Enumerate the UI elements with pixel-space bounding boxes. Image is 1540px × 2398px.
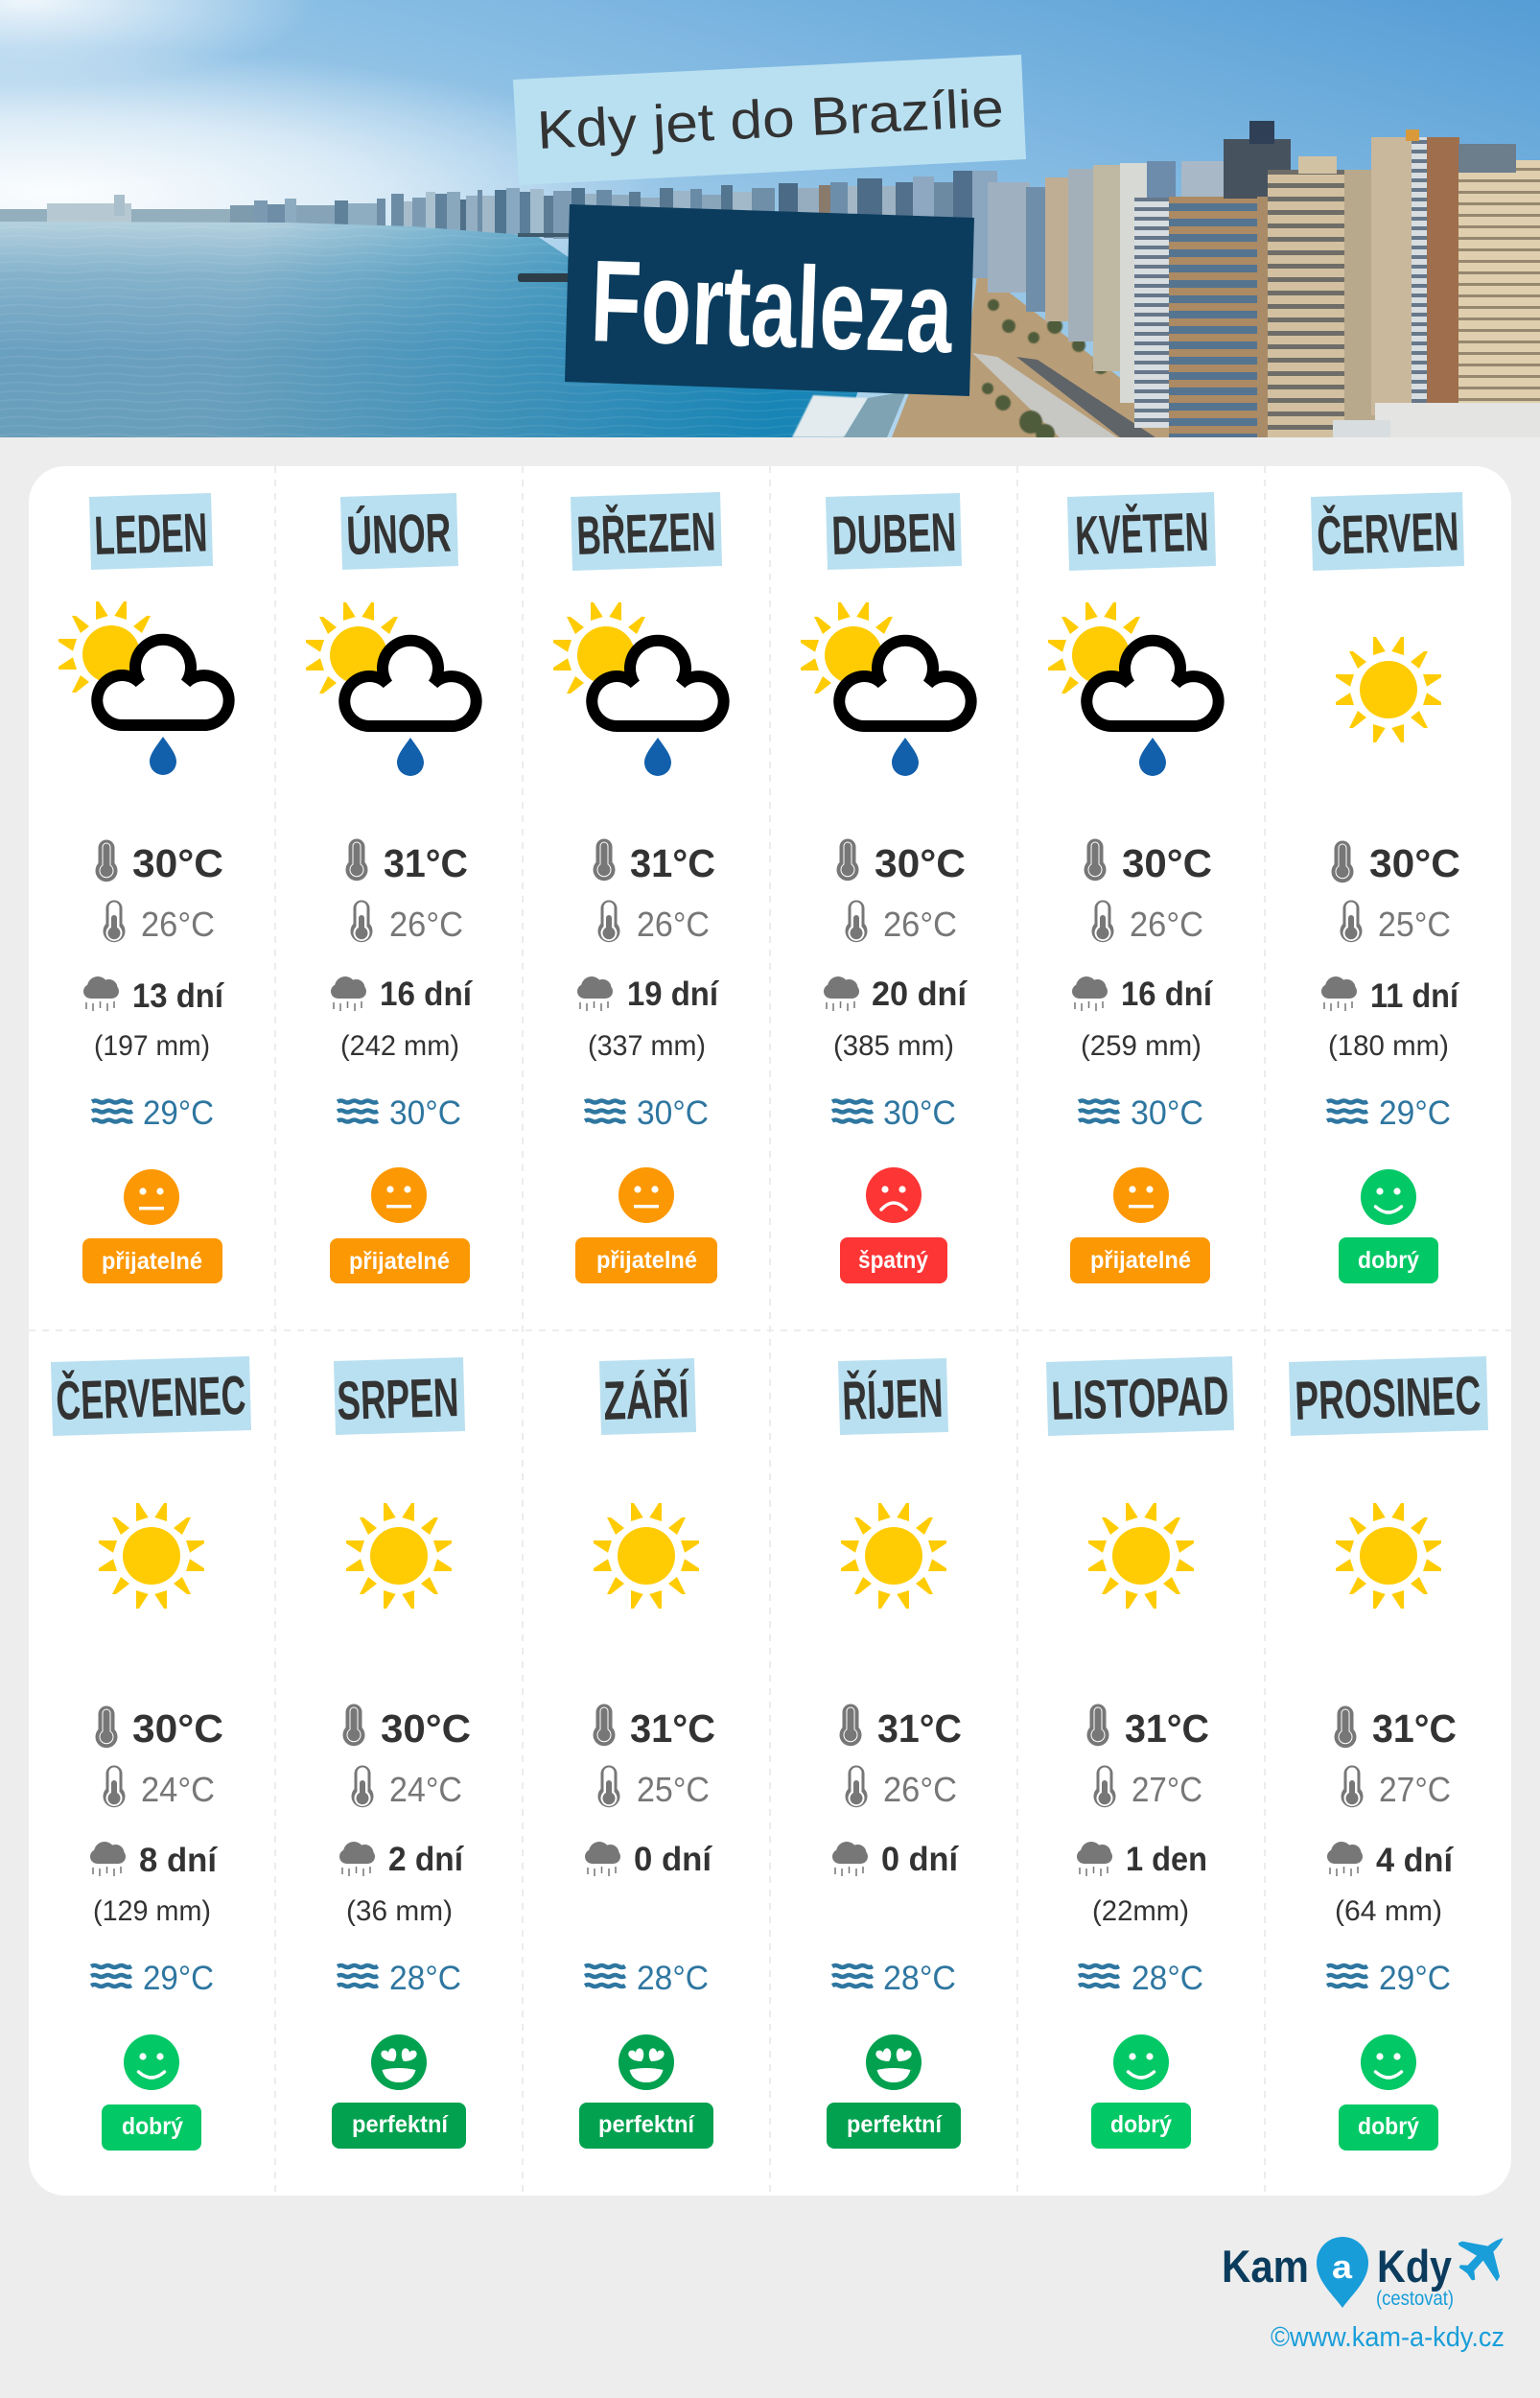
rating badge [332,2103,466,2149]
max temperature [1331,840,1460,885]
heading: BŘEZEN [571,492,722,571]
rating badge: perfektní [598,2111,695,2138]
min temperature [846,1765,957,1809]
column: ČERVENEC [51,1356,251,2151]
column: LISTOPAD [1046,1356,1234,2149]
min temperature: 26°C [883,1770,957,1809]
rainy days [1077,1841,1207,1878]
heading: ZÁŘÍ: ZÁŘÍ [602,1367,691,1432]
max temperature: 30°C [132,841,223,885]
icon: sun [346,1503,452,1609]
heading: ÚNOR [340,493,458,570]
min temperature [846,900,957,944]
column: SRPEN [332,1357,471,2149]
rainfall: (64 mm) [1335,1895,1442,1927]
logo: Kam a Kdy (cestovat): (cestovat) [1376,2288,1454,2310]
rainfall: (36 mm) [346,1895,453,1927]
sea temperature [338,1960,461,1997]
min temperature: 27°C [1379,1770,1451,1809]
min temperature: 26°C [637,905,710,944]
heading: DUBEN: DUBEN [830,502,957,567]
sea temperature [1079,1094,1203,1132]
column: ŘÍJEN [827,1358,962,2149]
sea temperature: 30°C [883,1094,956,1132]
rating badge: perfektní [352,2111,449,2138]
rainy days [1321,976,1459,1015]
rating smiley [618,2034,674,2090]
max temperature: 31°C [630,841,715,885]
max temperature: 30°C [875,841,966,885]
rating badge: dobrý [1358,1247,1419,1274]
min temperature: 26°C [141,905,215,944]
max temperature: 30°C [1122,841,1212,885]
rating smiley [371,2034,427,2090]
max temperature: 30°C [1369,841,1460,885]
icon: map pin: a [1332,2249,1353,2286]
rating smiley [1113,1167,1169,1223]
min temperature [1093,1765,1202,1809]
max temperature [1084,838,1212,885]
subtitle tag: Kdy jet do Brazílie: Kdy jet do Brazílie [536,77,1005,160]
icon: sun [841,1503,946,1609]
rating badge [1339,2104,1438,2151]
min temperature [351,1765,462,1809]
column: LEDEN [58,493,229,1283]
rating badge: dobrý [1110,2111,1172,2138]
rainy days [90,1842,218,1879]
min temperature [351,900,463,944]
rainfall: (385 mm) [833,1030,954,1062]
icon: sun [1088,1503,1194,1609]
rating badge [579,2103,713,2149]
rating badge [827,2103,961,2149]
rainy days [331,976,473,1013]
column: ČERVEN [1311,492,1464,1283]
heading: SRPEN: SRPEN [336,1367,459,1432]
rating smiley [124,2034,179,2090]
sea temperature: 29°C [1379,1094,1451,1132]
rainy days [832,1841,959,1878]
icon: sun with cloud and rain [58,601,229,775]
max temperature [1087,1704,1209,1751]
heading: KVĚTEN: KVĚTEN [1074,501,1209,567]
rating smiley [1361,1169,1416,1225]
rainy days [1072,976,1213,1013]
rating smiley [1361,2034,1416,2090]
rainfall: (242 mm) [340,1030,459,1062]
sea temperature [832,1960,956,1997]
min temperature: 24°C [389,1770,462,1809]
heading: ČERVEN [1311,492,1464,571]
rating smiley [866,2034,922,2090]
rainfall: (180 mm) [1328,1030,1449,1062]
rating badge: přijatelné [349,1248,450,1275]
rating badge: přijatelné [1090,1247,1191,1274]
rainfall: (22mm) [1092,1895,1189,1927]
heading: ČERVEN: ČERVEN [1316,500,1459,567]
sea temperature [92,1094,214,1132]
min temperature: 26°C [1130,905,1203,944]
icon: map pin [1317,2237,1368,2308]
rainy days [83,976,224,1015]
min temperature [104,900,215,944]
max temperature [96,1705,223,1751]
website credit: ©www.kam-a-kdy.cz [1271,2322,1505,2353]
rainy days: 19 dní [627,976,719,1013]
rating badge [840,1237,947,1283]
max temperature [345,838,468,885]
rating badge [82,1238,222,1283]
heading: LISTOPAD: LISTOPAD [1050,1365,1229,1432]
max temperature: 31°C [877,1706,962,1751]
max temperature: 31°C [1125,1706,1209,1751]
rating badge [330,1238,470,1283]
sea temperature [1327,1960,1451,1997]
icon: sun [1336,1503,1441,1609]
max temperature [840,1704,962,1751]
min temperature [1091,900,1203,944]
rainfall: (259 mm) [1081,1030,1202,1062]
sea temperature: 29°C [143,1960,214,1997]
rating smiley [1113,2034,1169,2090]
heading: ZÁŘÍ [599,1358,696,1435]
column: ÚNOR [306,493,477,1283]
rating smiley [618,1167,674,1223]
min temperature: 25°C [637,1770,710,1809]
icon: sun with cloud and rain [801,602,971,776]
rating badge: špatný [858,1247,928,1274]
max temperature [593,838,715,885]
icon: airplane [1458,2238,1504,2281]
max temperature: 31°C [384,841,468,885]
rainy days: 4 dní [1376,1842,1454,1879]
subtitle tag: Kdy jet do Brazílie [513,55,1026,185]
max temperature: 30°C [132,1706,223,1751]
heading: PROSINEC [1289,1356,1488,1436]
rating badge: perfektní [847,2111,943,2138]
rating badge [102,2104,201,2151]
heading: DUBEN [826,493,962,570]
sea temperature: 30°C [637,1094,709,1132]
max temperature [836,838,966,885]
rainy days: 2 dní [388,1841,464,1878]
sea temperature: 28°C [1132,1960,1203,1997]
rating smiley [371,1167,427,1223]
rainy days: 13 dní [132,977,224,1015]
logo: Kam a Kdy (cestovat): Kam [1222,2241,1309,2292]
max temperature [343,1704,471,1751]
heading: ŘÍJEN: ŘÍJEN [841,1367,944,1432]
heading: SRPEN [334,1357,465,1435]
title tag: Fortaleza [565,204,974,396]
rainy days [824,976,968,1013]
column: KVĚTEN [1048,492,1219,1283]
min temperature: 26°C [883,905,957,944]
column: PROSINEC [1289,1356,1488,2151]
heading: ŘÍJEN [838,1358,948,1435]
min temperature [598,900,710,944]
min temperature: 25°C [1378,905,1451,944]
icon: sun [1336,637,1441,742]
icon: sun with cloud and rain [553,602,724,776]
sea temperature: 28°C [883,1960,956,1997]
icon: sun [594,1503,699,1609]
rainy days: 16 dní [380,976,473,1013]
min temperature [1341,1765,1451,1809]
heading: ČERVENEC: ČERVENEC [55,1364,246,1432]
max temperature: 31°C [1372,1706,1457,1751]
sea temperature [1327,1094,1451,1132]
heading: LEDEN [89,493,213,570]
min temperature [1341,900,1451,944]
rating smiley [866,1167,922,1223]
sea temperature: 30°C [1131,1094,1203,1132]
max temperature [1335,1705,1457,1751]
rating badge [1091,2103,1191,2149]
rainfall: (337 mm) [588,1030,706,1062]
sea temperature [832,1094,956,1132]
rainy days: 1 den [1126,1841,1207,1878]
column: ZÁŘÍ [579,1358,715,2149]
column: DUBEN [801,493,971,1283]
heading: ÚNOR: ÚNOR [345,503,452,567]
rainy days: 0 dní [881,1841,959,1878]
sea temperature [585,1960,709,1997]
rainy days: 20 dní [872,976,968,1013]
max temperature: 31°C [630,1706,715,1751]
min temperature [598,1765,710,1809]
sea temperature: 30°C [389,1094,461,1132]
rating badge: dobrý [1358,2113,1419,2140]
sea temperature [585,1094,709,1132]
sea temperature: 29°C [143,1094,214,1132]
rating badge: dobrý [122,2113,183,2140]
heading: LISTOPAD [1046,1356,1234,1436]
title tag: Fortaleza: Fortaleza [589,235,956,378]
sea temperature: 28°C [389,1960,461,1997]
icon: sun with cloud and rain [1048,602,1219,776]
icon: sun with cloud and rain [306,602,477,776]
heading: KVĚTEN [1067,492,1216,571]
column: BŘEZEN [553,492,724,1283]
rating badge [1339,1237,1438,1283]
min temperature: 26°C [389,905,463,944]
min temperature: 27°C [1132,1770,1202,1809]
rainy days [1327,1842,1454,1879]
logo: Kam a Kdy (cestovat): Kdy [1377,2241,1452,2292]
rainy days: 16 dní [1121,976,1213,1013]
min temperature: 24°C [141,1770,215,1809]
sea temperature: 28°C [637,1960,709,1997]
rating badge: přijatelné [596,1247,697,1274]
rating badge [1070,1237,1210,1283]
rainy days [339,1841,464,1878]
max temperature [96,840,223,885]
rainy days: 0 dní [634,1841,712,1878]
heading: ČERVENEC [51,1356,251,1436]
rainy days [577,976,719,1013]
rainfall: (197 mm) [94,1030,210,1062]
heading: LEDEN: LEDEN [93,502,208,567]
rainy days: 8 dní [139,1842,218,1879]
max temperature [593,1704,715,1751]
rating badge: přijatelné [102,1248,202,1275]
max temperature: 30°C [381,1706,471,1751]
icon: sun [99,1503,204,1609]
sea temperature [1079,1960,1203,1997]
hero photo: Fortaleza seafront [0,0,1540,443]
rating smiley [124,1169,179,1225]
logo: Kam a Kdy (cestovat) [1222,2237,1504,2310]
rainy days: 11 dní [1370,977,1459,1015]
rainy days [585,1841,712,1878]
heading: BŘEZEN: BŘEZEN [575,500,716,567]
min temperature [104,1765,215,1809]
panel: months card [29,466,1511,2196]
rainfall: (129 mm) [93,1895,211,1927]
sea temperature [91,1960,214,1997]
sea temperature: 29°C [1379,1960,1451,1997]
sea temperature [338,1094,461,1132]
rating badge [575,1237,717,1283]
